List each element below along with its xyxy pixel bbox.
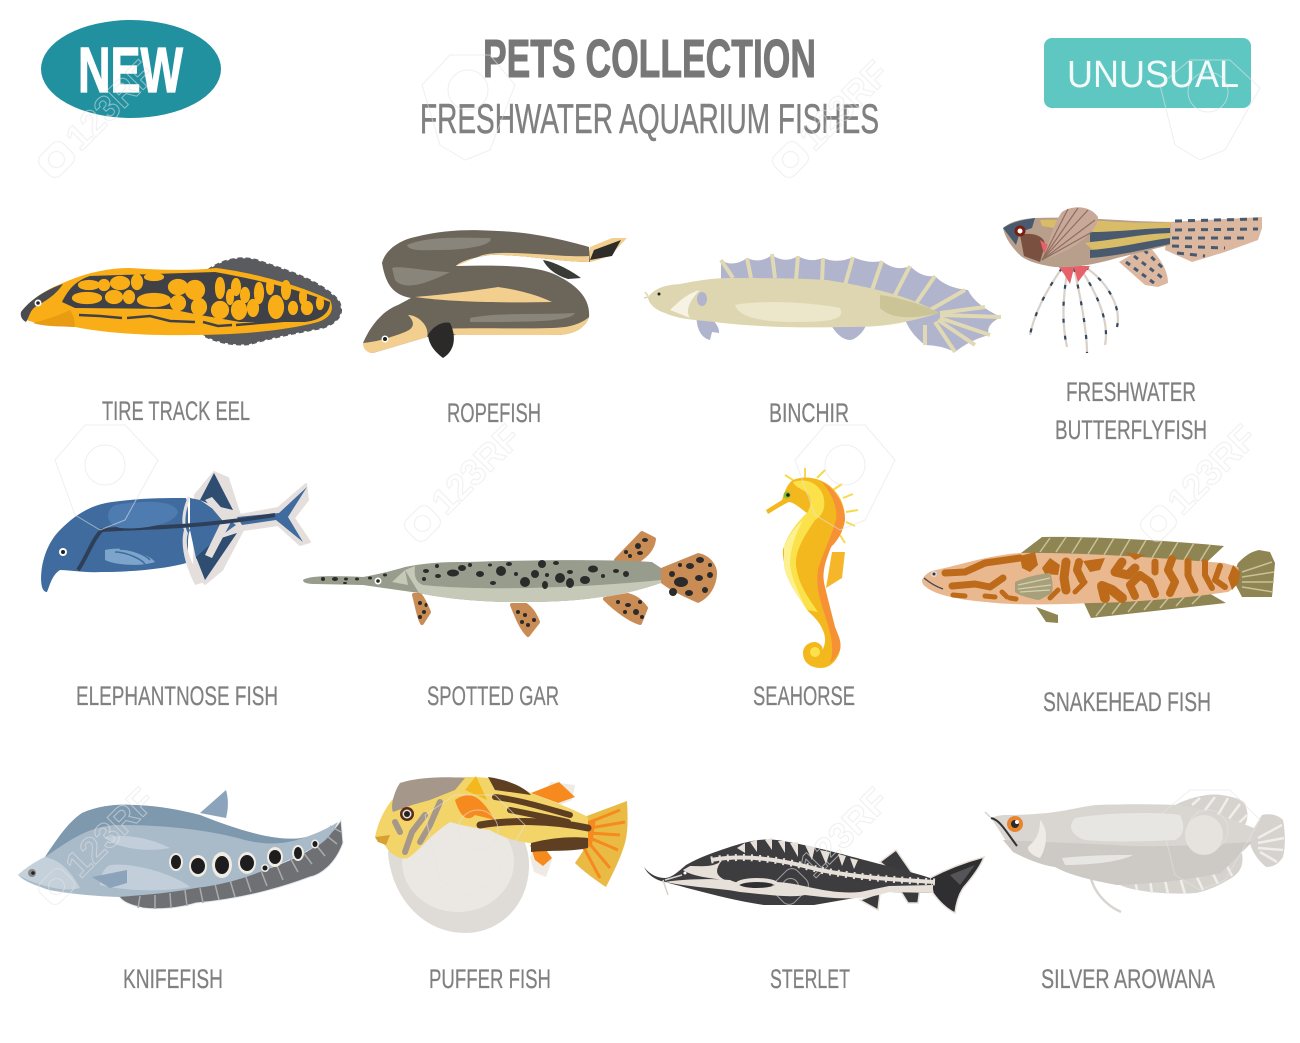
label: puffer fish: PUFFER FISH (429, 964, 551, 994)
title: PETS COLLECTION (483, 29, 816, 89)
label: sterlet: STERLET (770, 964, 850, 994)
watermarks (30, 53, 1265, 912)
label: freshwater butterflyfish: FRESHWATER (1066, 377, 1196, 407)
label: spotted gar: SPOTTED GAR (427, 681, 559, 711)
subtitle: FRESHWATER AQUARIUM FISHES (420, 95, 879, 142)
label: elephantnose fish: ELEPHANTNOSE FISH (76, 681, 278, 711)
label: knifefish: KNIFEFISH (123, 964, 223, 994)
fish: elephantnose (41, 472, 310, 592)
label: tire track eel: TIRE TRACK EEL (102, 396, 250, 426)
fish: binchir (644, 254, 1001, 352)
label: binchir: BINCHIR (769, 398, 849, 428)
label: seahorse: SEAHORSE (753, 681, 855, 711)
fish: tire track eel (21, 258, 341, 345)
badge: new: NEW (78, 34, 183, 106)
fish: silver arowana (985, 794, 1285, 912)
fish: sterlet (644, 838, 984, 913)
fish: puffer fish (375, 776, 628, 933)
badge: unusual: UNUSUAL (1067, 54, 1239, 96)
watermarks: 123RF (791, 53, 897, 158)
label: ropefish: ROPEFISH (447, 398, 541, 428)
fish: spotted gar (303, 533, 717, 635)
label: freshwater butterflyfish: BUTTERFLYFISH (1055, 415, 1207, 445)
fish: ropefish (363, 230, 627, 358)
fish: freshwater butterflyfish (1003, 207, 1262, 353)
label: snakehead fish: SNAKEHEAD FISH (1043, 687, 1211, 717)
watermarks: 123RF (57, 53, 163, 158)
badge: unusual (1044, 38, 1251, 108)
watermarks: 123RF (1159, 417, 1265, 522)
watermarks: 123RF (791, 780, 897, 885)
fish: knifefish (18, 790, 343, 909)
fish: seahorse (766, 468, 858, 668)
label: silver arowana: SILVER AROWANA (1041, 964, 1215, 994)
label: freshwater butterflyfish (1055, 377, 1207, 445)
watermarks: 123RF (423, 417, 529, 522)
fish: snakehead (922, 537, 1275, 623)
watermarks: 123RF (57, 780, 163, 885)
badge: new (41, 20, 221, 118)
